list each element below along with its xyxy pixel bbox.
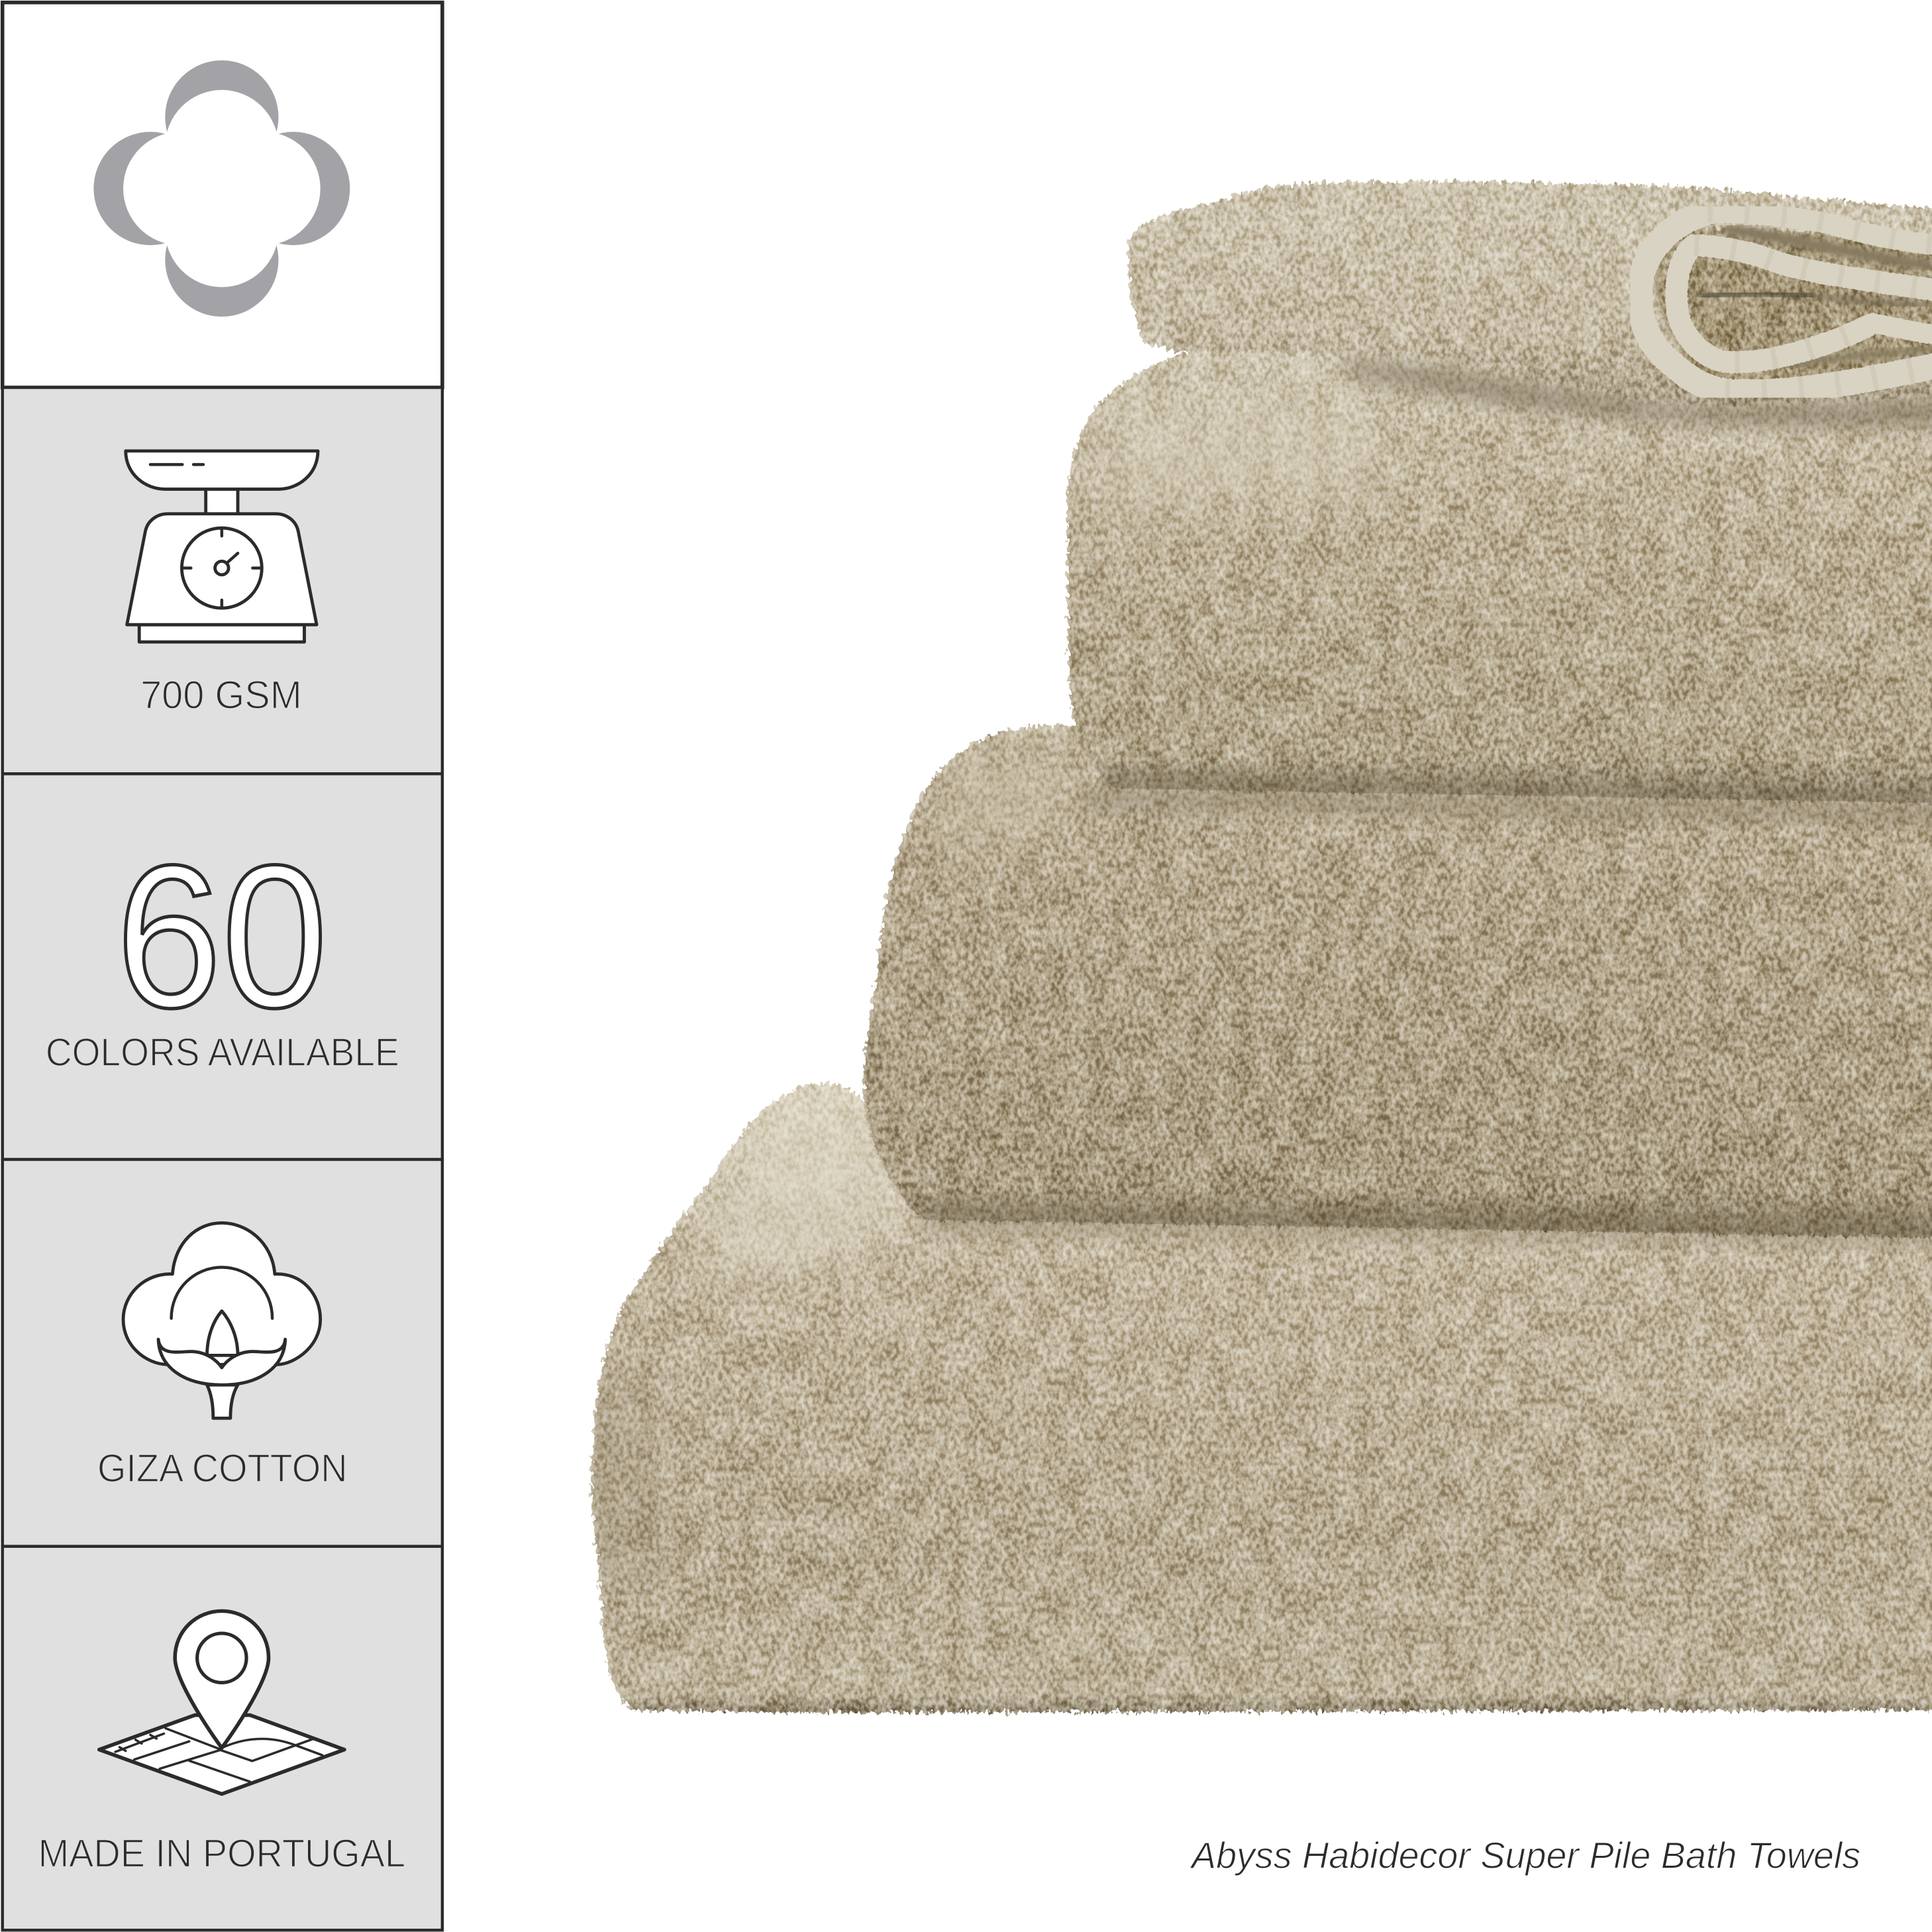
panel: 60 colors available (3, 774, 442, 1160)
icon: kitchen scale (126, 451, 318, 642)
towel stack photo (579, 181, 1932, 1713)
label: 700 GSM: 700 GSM (140, 673, 302, 717)
towel: upper hand towel (1067, 335, 1932, 813)
caption: Abyss Habidecor Super Pile Bath Towels (1190, 1834, 1860, 1876)
icon: quatrefoil logo (93, 60, 350, 317)
fold: inner hem band (1694, 245, 1932, 289)
number: 60: 60 (116, 823, 328, 1050)
panel: logo (3, 3, 442, 387)
label: giza cotton: GIZA COTTON (97, 1446, 348, 1490)
towel: folded washcloth on top (1128, 181, 1932, 404)
panel: giza cotton (3, 1160, 442, 1547)
label: made in portugal: MADE IN PORTUGAL (38, 1831, 405, 1875)
panel: 700 GSM weight (3, 387, 442, 774)
icon: cotton boll (123, 1223, 321, 1418)
fold: outer hem band (1707, 212, 1932, 245)
towel: middle bath towel (864, 725, 1932, 1245)
towel: large bottom bath sheet (579, 1084, 1932, 1713)
panel: made in portugal (3, 1547, 442, 1930)
washcloth fold interior (1640, 212, 1932, 393)
icon: map with location pin (99, 1611, 344, 1794)
label: colors available: COLORS AVAILABLE (46, 1030, 399, 1074)
